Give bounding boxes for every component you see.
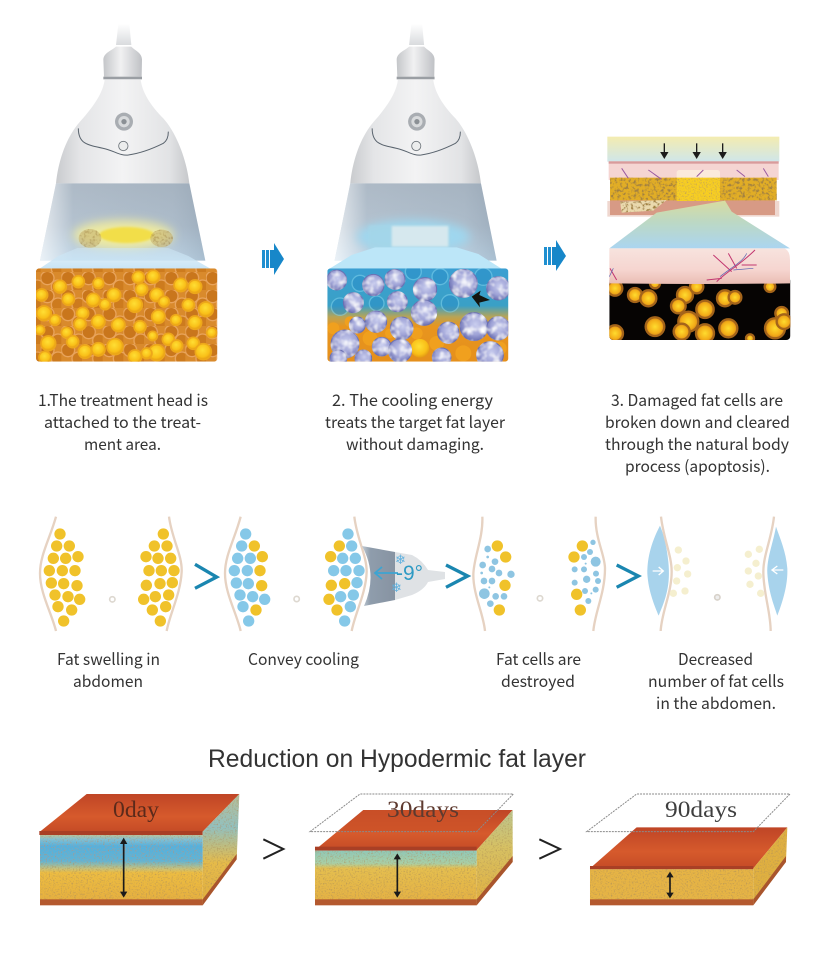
chart: fat layer blocks bbox=[39, 794, 790, 905]
icon: cooling probe with temperature: ❄ bbox=[395, 553, 406, 568]
frozen fat tissue block bbox=[327, 268, 508, 362]
abdomen outline: fat cells destroyed bbox=[473, 517, 605, 631]
blue glow in the applicator bbox=[357, 220, 470, 253]
text: step 3 caption: 3. Damaged fat cells are bbox=[611, 387, 783, 411]
label: 90 days: 90days bbox=[665, 797, 737, 822]
pressure arrows bbox=[661, 143, 726, 158]
icon: cooling device bbox=[335, 24, 497, 261]
arrow: step 1 to step 2 bbox=[262, 243, 284, 275]
chevron bbox=[539, 839, 560, 859]
text: step 2 caption: without damaging. bbox=[346, 431, 484, 455]
skin cross-section bbox=[607, 137, 779, 217]
arrow: step 2 to step 3 bbox=[544, 240, 566, 271]
text: decreased fat cells label bbox=[648, 646, 784, 714]
magnification beam bbox=[609, 201, 790, 248]
text: decreased fat cells label: number of fat cells bbox=[648, 668, 784, 692]
text: fat swelling label bbox=[57, 646, 160, 692]
heading: reduction on hypodermic fat layer: Reduction on Hypodermic fat layer bbox=[208, 745, 586, 773]
icon: cooling probe with temperature: ❄ bbox=[391, 581, 402, 596]
chevron bbox=[263, 839, 283, 859]
block: 90 days bbox=[539, 794, 790, 905]
text: fat cells destroyed label bbox=[496, 646, 581, 692]
label: 30 days: 30days bbox=[387, 797, 459, 822]
text: decreased fat cells label: Decreased bbox=[678, 646, 753, 670]
text: fat cells destroyed label: destroyed bbox=[501, 668, 575, 692]
diagram: abdomen stages three and four bbox=[446, 517, 787, 631]
abdomen outline: fat swelling bbox=[40, 517, 182, 631]
label: 0 day: 0day bbox=[113, 797, 160, 822]
chevron bbox=[617, 565, 638, 587]
icon: cooling probe with temperature: -9° bbox=[396, 562, 423, 585]
text: fat cells destroyed label: Fat cells are bbox=[496, 646, 581, 670]
panel: step 2 cooling energy bbox=[327, 24, 510, 368]
magnified skin with vessels bbox=[609, 248, 790, 284]
cooling beam bbox=[40, 248, 212, 269]
text: step 3 caption: through the natural body bbox=[605, 431, 790, 455]
text: convey cooling label: Convey cooling bbox=[248, 646, 359, 670]
icon: treatment head device bbox=[40, 24, 205, 261]
chevron bbox=[446, 565, 468, 587]
text: step 1 caption bbox=[38, 387, 208, 455]
panel: step 3 damaged fat cells bbox=[607, 137, 791, 342]
text: fat swelling label: Fat swelling in bbox=[57, 646, 160, 670]
text: step 3 caption: process (apoptosis). bbox=[625, 453, 770, 477]
magnified tissue bbox=[607, 277, 791, 342]
block: 0 day bbox=[39, 794, 239, 905]
text: step 2 caption bbox=[325, 387, 506, 455]
text: decreased fat cells label: in the abdomen. bbox=[656, 690, 776, 714]
text: step 3 caption bbox=[605, 387, 790, 477]
abdomen outline: convey cooling bbox=[225, 517, 367, 631]
text: step 2 caption: treats the target fat layer bbox=[325, 409, 506, 433]
fat cell tissue block bbox=[35, 268, 217, 363]
block: 30 days bbox=[310, 794, 513, 905]
icon: cooling probe with temperature bbox=[362, 546, 445, 606]
yellow glow in the applicator bbox=[73, 220, 173, 250]
cooling beam bbox=[330, 247, 503, 269]
panel: step 1 treatment head bbox=[35, 24, 217, 363]
text: step 1 caption: 1.The treatment head is bbox=[38, 387, 208, 411]
abdomen outline: decreased fat bbox=[647, 517, 787, 631]
text: step 1 caption: ment area. bbox=[84, 431, 161, 455]
text: step 3 caption: broken down and cleared bbox=[605, 409, 790, 433]
text: step 2 caption: 2. The cooling energy bbox=[332, 387, 494, 411]
text: fat swelling label: abdomen bbox=[73, 668, 143, 692]
text: step 1 caption: attached to the treat- bbox=[44, 409, 201, 433]
diagram: abdomen stages one and two bbox=[40, 517, 367, 631]
chevron bbox=[195, 564, 217, 588]
